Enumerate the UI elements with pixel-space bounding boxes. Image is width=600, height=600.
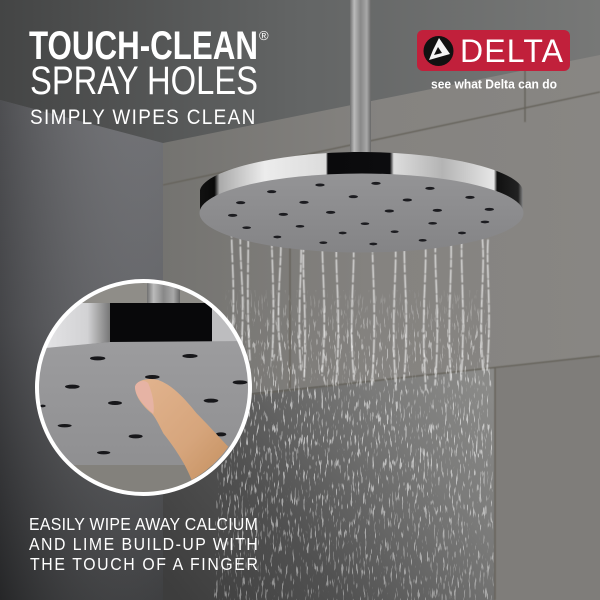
chrome rim left: [46, 303, 110, 348]
delta logo: [417, 30, 570, 92]
registered mark: ®: [259, 28, 269, 43]
title block: [29, 24, 269, 129]
ceiling: [0, 0, 600, 143]
spray holes: [228, 182, 494, 245]
spray face close-up: [39, 341, 248, 465]
chrome rim right: [212, 308, 237, 342]
subheading: SIMPLY WIPES CLEAN: [30, 106, 255, 129]
white ring: [37, 281, 250, 494]
caption line 2: AND LIME BUILD-UP WITH: [29, 534, 258, 554]
water streams: [232, 210, 489, 390]
tagline: see what Delta can do: [431, 78, 557, 92]
icon: delta emblem: [424, 36, 454, 66]
fingernail: [135, 381, 154, 414]
caption line 1: EASILY WIPE AWAY CALCIUM: [29, 514, 258, 534]
lower tile: [163, 368, 495, 600]
back wall: [163, 50, 600, 600]
magnified finger circle: [35, 279, 257, 500]
shower arm: [350, 0, 371, 152]
spray face: [200, 174, 524, 252]
right lower tile: [495, 356, 600, 600]
red badge: [417, 30, 570, 71]
heading: touch-clean: TOUCH-CLEAN: [29, 24, 258, 68]
threaded stem: [147, 283, 180, 303]
close-up holes: [40, 354, 247, 454]
finger: [135, 379, 228, 480]
wall inside circle: [82, 283, 204, 303]
caption line 3: THE TOUCH OF A FINGER: [30, 554, 258, 574]
shower head: [200, 152, 524, 252]
tile grout lines: [163, 58, 600, 600]
rim: [200, 152, 523, 213]
heading: spray holes: SPRAY HOLES: [30, 59, 258, 103]
left wall: [0, 100, 163, 600]
bottom caption: [29, 514, 258, 574]
circle contents: [39, 283, 248, 492]
wordmark: DELTA: [460, 33, 564, 69]
water spray: [200, 290, 500, 600]
chrome dark band: [110, 303, 212, 343]
bottom wall reflection: [74, 465, 214, 492]
